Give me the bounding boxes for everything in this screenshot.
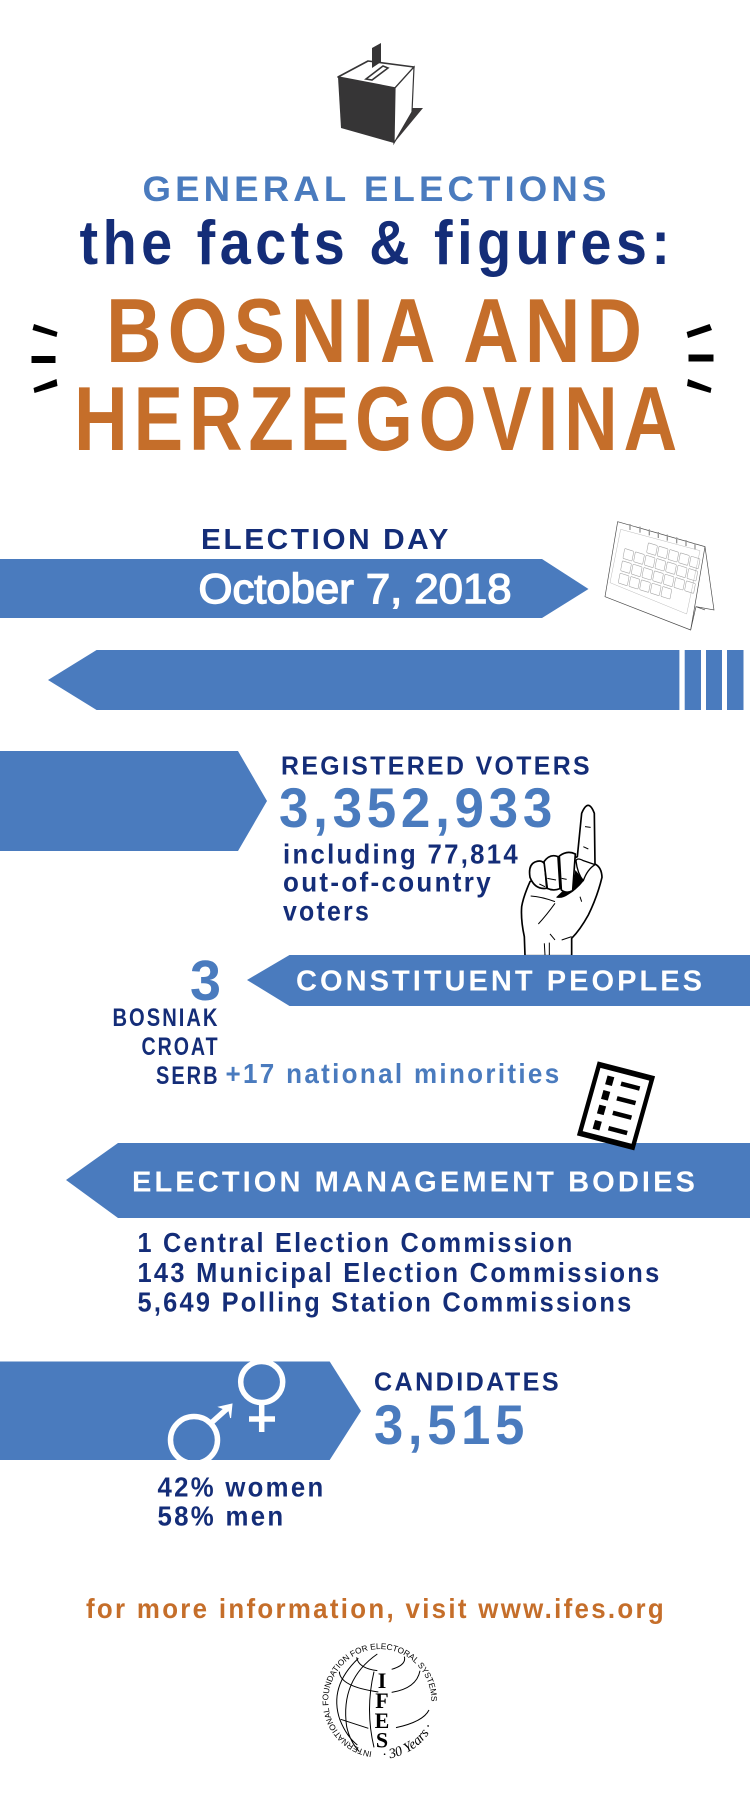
heading: Bosnia and: BOSNIA AND bbox=[106, 281, 648, 382]
heading: candidates: CANDIDATES bbox=[374, 1367, 561, 1397]
election date: October 7, 2018 bbox=[198, 565, 512, 612]
icon: ballot box bbox=[338, 43, 423, 143]
text: out of country note: including 77,814 bbox=[283, 838, 520, 869]
panel: candidates bbox=[158, 1367, 561, 1532]
logo: IFES globe: INTERNATIONAL FOUNDATION FOR ELECTORAL SYSTEMS bbox=[322, 1643, 437, 1757]
icon: checklist bbox=[580, 1065, 652, 1147]
text: more information link: for more information, visit www.ifes.org bbox=[86, 1593, 666, 1624]
text: gender split bbox=[158, 1472, 326, 1532]
list: peoples: BOSNIAK bbox=[112, 1004, 220, 1032]
list: peoples: CROAT bbox=[142, 1033, 220, 1061]
arrow: registered voters banner bbox=[0, 751, 267, 851]
banner label: election management bodies: ELECTION MANAGEMENT BODIES bbox=[132, 1167, 698, 1199]
text: gender split: 58% men bbox=[158, 1501, 286, 1532]
list: election commissions: 1 Central Election Commission bbox=[138, 1227, 574, 1258]
icon: left emphasis ticks bbox=[32, 324, 58, 393]
heading: the facts and figures: the facts & figures: bbox=[80, 209, 674, 278]
list: election commissions bbox=[138, 1227, 662, 1318]
panel: registered voters bbox=[279, 750, 592, 927]
logo: IFES globe: · 30 Years · bbox=[384, 1725, 429, 1758]
list: election commissions: 143 Municipal Election Commissions bbox=[138, 1257, 662, 1288]
icon: raised index finger hand bbox=[521, 805, 602, 956]
logo: IFES globe: F bbox=[375, 1688, 389, 1713]
logo: IFES globe: E bbox=[375, 1708, 389, 1733]
logo: IFES globe: I bbox=[378, 1668, 386, 1693]
stat: voter count: 3,352,933 bbox=[279, 776, 557, 839]
text: out of country note: out-of-country bbox=[283, 867, 493, 898]
arrow: election management bodies banner bbox=[66, 1143, 750, 1218]
arrow: constituent peoples banner bbox=[247, 955, 750, 1006]
logo: IFES globe: S bbox=[376, 1728, 388, 1752]
arrow: candidates banner bbox=[0, 1362, 361, 1460]
arrow: striped empty banner bbox=[48, 650, 744, 710]
icon: male and female symbols bbox=[170, 1362, 283, 1464]
text: gender split: 42% women bbox=[158, 1472, 326, 1503]
arrow: election date bbox=[0, 559, 588, 618]
text: out of country note bbox=[283, 838, 520, 927]
panel: constituent peoples facts bbox=[112, 949, 562, 1090]
list: peoples: SERB bbox=[156, 1062, 220, 1090]
label: election day: ELECTION DAY bbox=[201, 524, 451, 556]
icon: desk calendar bbox=[605, 522, 714, 630]
heading: registered voters: REGISTERED VOTERS bbox=[281, 750, 592, 780]
stat: three peoples: 3 bbox=[190, 949, 221, 1013]
panel: election day bbox=[0, 524, 588, 618]
text: national minorities: +17 national minorities bbox=[226, 1058, 562, 1089]
list: election commissions: 5,649 Polling Station Commissions bbox=[138, 1287, 634, 1318]
list: peoples bbox=[112, 1004, 220, 1090]
text: out of country note: voters bbox=[283, 896, 371, 927]
stat: candidate count: 3,515 bbox=[374, 1393, 529, 1456]
banner label: constituent peoples: CONSTITUENT PEOPLES bbox=[296, 966, 705, 998]
title block bbox=[74, 169, 683, 470]
heading: general elections: GENERAL ELECTIONS bbox=[142, 169, 610, 209]
icon: right emphasis ticks bbox=[687, 324, 714, 393]
